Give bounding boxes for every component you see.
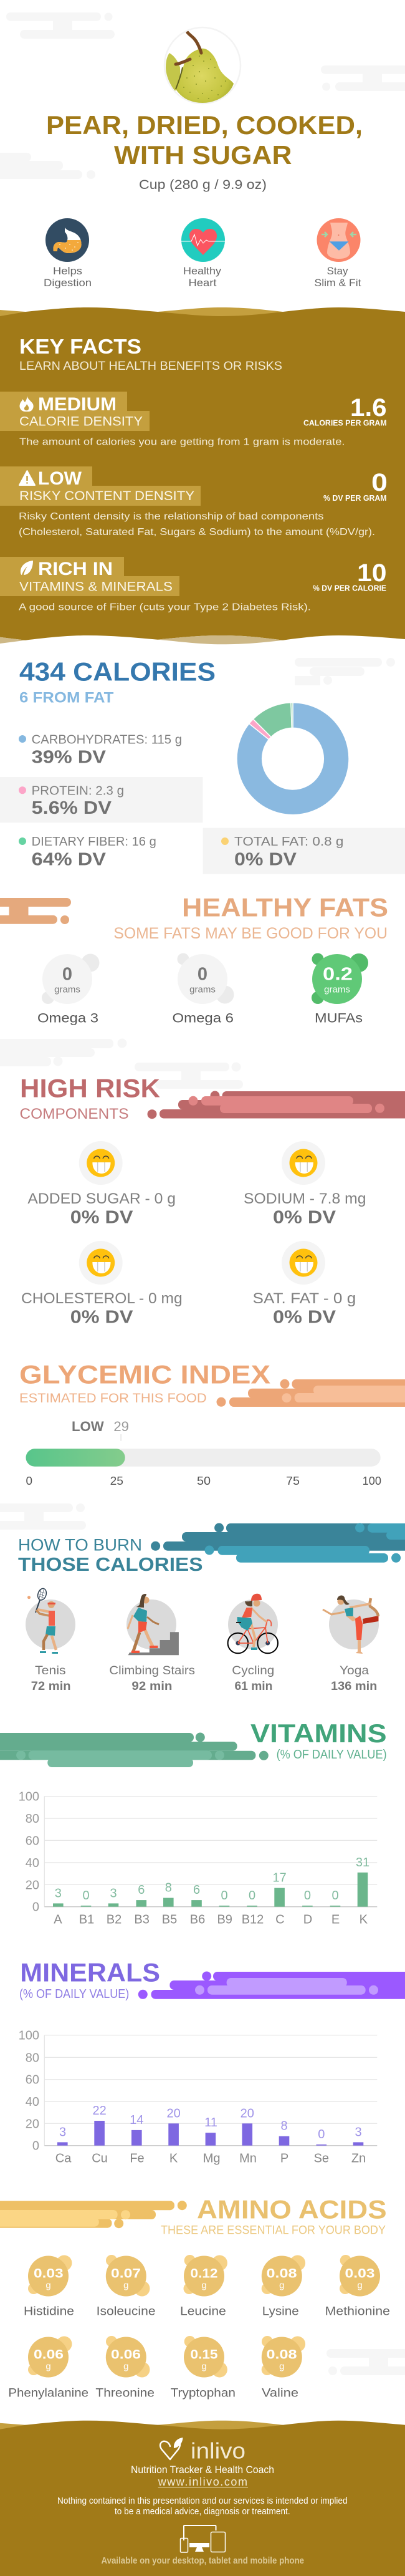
omega 3 (37, 954, 100, 1025)
label: healthy heart: Healthy (183, 265, 222, 277)
label: healthy heart (183, 265, 222, 289)
legend: dietary fiber: 64% DV (32, 849, 107, 869)
mufas: grams (324, 985, 350, 995)
bar chart: minerals: 100 (19, 2029, 39, 2043)
bar chart: minerals (19, 2029, 377, 2165)
bar chart: minerals: 20 (26, 2117, 39, 2131)
glycemic value: LOW (72, 1419, 104, 1434)
amino: phenylalanine: g (45, 2361, 51, 2371)
glycemic axis labels: 100 (363, 1475, 381, 1487)
amino: valine: 0.08 (267, 2347, 297, 2361)
activity labels: 61 min (234, 1680, 272, 1693)
activity: cycling (228, 1594, 278, 1653)
legend: protein: PROTEIN: 2.3 g (32, 783, 124, 798)
serving size: Cup (280 g / 9.9 oz) (139, 178, 267, 192)
risk: cholesterol: 0% DV (70, 1308, 133, 1328)
bar chart: vitamins (19, 1790, 377, 1926)
amino: valine: Valine (262, 2386, 298, 2400)
bar chart: vitamins: B3 (134, 1913, 150, 1926)
bar chart: minerals: Zn (351, 2151, 366, 2165)
amino: lysine: 0.08 (267, 2266, 297, 2280)
mufas: MUFAs (315, 1011, 363, 1025)
bar chart: vitamins: E (331, 1913, 340, 1926)
risk: sodium: 0% DV (273, 1208, 336, 1228)
icon: leaf (21, 561, 33, 575)
omega 3: Omega 3 (37, 1011, 98, 1025)
amino: histidine: 0.03 (34, 2266, 64, 2280)
amino: phenylalanine: 0.06 (34, 2347, 64, 2361)
glycemic axis labels: 75 (286, 1475, 300, 1487)
label: healthy heart: Heart (188, 277, 217, 289)
value: 1.6 calories per gram: CALORIES PER GRAM (303, 419, 387, 428)
bar chart: vitamins: B2 (107, 1913, 122, 1926)
heading: healthy fats (113, 892, 388, 942)
bar chart: vitamins: 8 (165, 1881, 172, 1894)
panel: healthy fats (0, 892, 388, 1025)
heading decoration (217, 1379, 405, 1407)
heading: amino acids: THESE ARE ESSENTIAL FOR YOUR BODY (161, 2224, 386, 2237)
bar chart: minerals: 22 (92, 2104, 107, 2118)
amino: valine: g (279, 2361, 284, 2371)
risk: saturated fat: SAT. FAT - 0 g (253, 1290, 356, 1307)
activity: climbing stairs (126, 1594, 179, 1655)
icon: flame (19, 395, 34, 412)
panel: header (44, 27, 363, 289)
bar chart: minerals: Cu (92, 2151, 108, 2165)
value: 10 percent dv per calorie: 10 (357, 559, 387, 587)
bar chart: minerals: 14 (130, 2113, 143, 2127)
bar chart: minerals: P (280, 2151, 288, 2165)
activity labels: 136 min (331, 1680, 377, 1693)
risk: cholesterol (21, 1241, 183, 1328)
fact name: CALORIE DENSITY (19, 414, 143, 429)
legend: carbohydrates: CARBOHYDRATES: 115 g (32, 732, 182, 746)
label: stay slim and fit (314, 265, 361, 289)
bar chart: minerals: Se (314, 2151, 329, 2165)
heading: high risk: HIGH RISK (20, 1073, 160, 1102)
bar chart: vitamins: C (275, 1913, 285, 1926)
amino: lysine: Lysine (262, 2305, 299, 2318)
icon: warning (19, 471, 35, 485)
amino: threonine (95, 2336, 155, 2400)
bar chart: minerals: 0 (32, 2139, 39, 2153)
amino: isoleucine: g (123, 2280, 128, 2290)
value: 0 percent dv per gram (323, 469, 388, 503)
heading decoration (147, 1091, 405, 1119)
amino: histidine (24, 2255, 74, 2318)
title: PEAR, DRIED, COOKED, (46, 110, 363, 140)
bar chart: minerals: 3 (59, 2125, 66, 2139)
activity labels: Tenis (35, 1664, 66, 1677)
rating: medium: MEDIUM (38, 394, 117, 415)
value: 10 percent dv per calorie (313, 559, 387, 593)
bar chart: vitamins: K (360, 1913, 368, 1926)
fact name: RISKY CONTENT DENSITY (19, 488, 194, 503)
bar chart: minerals: 20 (166, 2106, 181, 2120)
amino: methionine: g (357, 2280, 363, 2290)
heading: minerals: MINERALS (20, 1957, 160, 1987)
bar chart: minerals: 80 (26, 2051, 39, 2065)
bar chart: vitamins: 0 (249, 1889, 255, 1903)
disclaimer (57, 2496, 348, 2517)
bar chart: minerals: Fe (130, 2151, 145, 2165)
description: (Cholesterol, Saturated Fat, Sugars & Sodium) to the amount (%DV/gr). (19, 527, 375, 538)
omega 6: 0 (198, 965, 207, 985)
bar chart: vitamins: 60 (26, 1834, 39, 1848)
heading: glycemic index: GLYCEMIC INDEX (19, 1359, 270, 1389)
legend: dietary fiber: DIETARY FIBER: 16 g (32, 834, 156, 849)
title (46, 110, 363, 170)
bar chart: vitamins: 0 (221, 1889, 228, 1903)
risk: saturated fat (253, 1241, 356, 1328)
logo: inlivo: inlivo (191, 2438, 245, 2463)
glycemic axis labels: 25 (110, 1475, 123, 1487)
heading: minerals (19, 1957, 160, 2001)
glycemic value (72, 1419, 129, 1441)
icon: stay slim (317, 218, 360, 262)
amino: tryptophan: g (201, 2361, 207, 2371)
amino: isoleucine: Isoleucine (97, 2305, 156, 2318)
amino: methionine: 0.03 (345, 2266, 375, 2280)
bar chart: vitamins: 40 (26, 1856, 39, 1870)
omega 6: Omega 6 (172, 1011, 234, 1025)
tagline: Nutrition Tracker & Health Coach (131, 2464, 274, 2476)
omega 3: 0 (62, 965, 72, 985)
description: The amount of calories you are getting from 1 gram is moderate. (19, 437, 345, 448)
donut chart (237, 703, 349, 815)
risk: added sugar (27, 1141, 176, 1228)
risk: saturated fat: 0% DV (273, 1308, 336, 1328)
activity labels: Climbing Stairs (109, 1664, 195, 1677)
heading: vitamins (250, 1719, 387, 1762)
heading: glycemic index (19, 1359, 270, 1406)
legend: protein (0, 777, 203, 822)
activity labels (31, 1664, 377, 1693)
fact: calorie density (0, 392, 387, 448)
amino: tryptophan (171, 2336, 236, 2400)
description (19, 511, 375, 538)
panel: vitamins (0, 1719, 387, 1926)
risk: sodium: SODIUM - 7.8 mg (244, 1190, 366, 1207)
heading: minerals: (% OF DAILY VALUE) (19, 1987, 129, 2001)
legend: dietary fiber (19, 834, 156, 869)
risk: sodium (244, 1141, 366, 1228)
glycemic bar (26, 1449, 381, 1467)
legend: total fat: TOTAL FAT: 0.8 g (234, 834, 343, 849)
bar chart: vitamins: 3 (110, 1886, 117, 1900)
value: 1.6 calories per gram: 1.6 (350, 394, 387, 422)
mufas: 0.2 (323, 965, 353, 985)
icon: devices (181, 2525, 226, 2552)
bar chart: minerals: 0 (318, 2128, 325, 2141)
amino: lysine (262, 2255, 305, 2318)
availability note: Available on your desktop, tablet and mobile phone (101, 2556, 304, 2566)
label: stay slim and fit: Stay (326, 265, 348, 277)
heading: amino acids: AMINO ACIDS (197, 2195, 387, 2224)
bar chart: minerals: Ca (55, 2151, 72, 2165)
value: 1.6 calories per gram (303, 394, 387, 428)
heading decoration (0, 1732, 269, 1767)
bar chart: vitamins: 0 (304, 1889, 311, 1903)
glycemic axis labels: 0 (26, 1475, 32, 1487)
heading: 434 calories: 434 CALORIES (19, 657, 216, 687)
disclaimer: to be a medical advice, diagnosis or treatment. (115, 2507, 290, 2517)
risk: added sugar: ADDED SUGAR - 0 g (27, 1190, 176, 1207)
bar chart: minerals: 20 (241, 2106, 254, 2120)
bar chart: minerals: 60 (26, 2073, 39, 2087)
panel: key facts (0, 307, 405, 644)
bar chart: vitamins: 0 (32, 1901, 39, 1914)
heading: key facts: KEY FACTS (19, 335, 141, 358)
heading decoration (0, 898, 71, 924)
activity labels: 72 min (31, 1680, 71, 1693)
bar chart: minerals: Mg (203, 2151, 220, 2165)
mufas (312, 953, 368, 1025)
amino: tryptophan: Tryptophan (171, 2386, 236, 2400)
icon: digestion (45, 218, 89, 262)
bar chart: minerals: 11 (204, 2116, 217, 2130)
amino: leucine: g (201, 2280, 207, 2290)
legend: carbohydrates (19, 732, 182, 767)
heading: key facts: LEARN ABOUT HEALTH BENEFITS OR RISKS (19, 359, 282, 373)
legend: carbohydrates: 39% DV (32, 747, 107, 767)
bar chart: vitamins: 20 (26, 1878, 39, 1892)
omega 6: grams (189, 985, 216, 995)
heading: vitamins: VITAMINS (250, 1719, 387, 1748)
bar chart: minerals: 3 (355, 2125, 362, 2139)
panel: footer (0, 2421, 405, 2576)
amino: histidine: g (45, 2280, 51, 2290)
bar chart: minerals: 40 (26, 2095, 39, 2109)
panel: glycemic index (19, 1359, 405, 1487)
panel: calories (0, 657, 405, 874)
heading: 434 calories (19, 657, 216, 707)
bar chart: vitamins: D (303, 1913, 312, 1926)
bar chart: vitamins: 80 (26, 1812, 39, 1826)
rating: rich in: RICH IN (38, 559, 113, 579)
legend: total fat (203, 828, 405, 874)
bar chart: vitamins: 0 (331, 1889, 339, 1903)
bar chart: vitamins: 31 (356, 1856, 369, 1869)
amino: lysine: g (279, 2280, 284, 2290)
amino: tryptophan: 0.15 (191, 2347, 218, 2361)
amino: threonine: Threonine (95, 2386, 155, 2400)
bar chart: minerals: 8 (280, 2120, 288, 2133)
heading: 434 calories: 6 FROM FAT (19, 690, 114, 707)
amino: histidine: Histidine (24, 2305, 74, 2318)
bar chart: minerals: K (169, 2151, 178, 2165)
activity labels: Yoga (340, 1664, 369, 1677)
activity: tennis (26, 1588, 75, 1654)
bar chart: vitamins: B1 (79, 1913, 94, 1926)
heading: high risk (20, 1073, 160, 1122)
heading: high risk: COMPONENTS (20, 1106, 128, 1122)
bar chart: vitamins: 100 (19, 1790, 39, 1804)
heading decoration (0, 2201, 187, 2228)
amino: isoleucine (97, 2255, 156, 2318)
bar chart: vitamins: B5 (162, 1913, 177, 1926)
website: www.inlivo.com (158, 2476, 247, 2488)
bar chart: vitamins: 3 (55, 1886, 62, 1900)
label: helps digestion (44, 265, 92, 289)
heading: healthy fats: SOME FATS MAY BE GOOD FOR YOU (113, 925, 388, 942)
glycemic axis labels (26, 1475, 381, 1487)
bar chart: vitamins: B6 (190, 1913, 205, 1926)
fact name: VITAMINS & MINERALS (19, 579, 173, 594)
logo: inlivo (160, 2438, 245, 2463)
rating: low: LOW (38, 468, 82, 489)
icon: healthy heart (181, 218, 225, 262)
amino: leucine: Leucine (180, 2305, 226, 2318)
description: Risky Content density is the relationship of bad components (19, 511, 324, 522)
bar chart: vitamins: B12 (242, 1913, 264, 1926)
value: 0 percent dv per gram: 0 (371, 469, 388, 496)
heading decoration (138, 1972, 405, 1999)
risk: cholesterol: CHOLESTEROL - 0 mg (21, 1290, 183, 1307)
bar chart: vitamins: A (54, 1913, 62, 1926)
heading: how to burn those calories: HOW TO BURN (18, 1536, 142, 1555)
glycemic axis labels: 50 (197, 1475, 211, 1487)
heading decoration (151, 1523, 405, 1563)
risk: added sugar: 0% DV (70, 1208, 133, 1228)
panel: minerals (19, 1957, 405, 2165)
pear photo in circle (164, 27, 241, 104)
bar chart: vitamins: B9 (217, 1913, 232, 1926)
amino: methionine (325, 2255, 390, 2318)
omega 3: grams (54, 985, 80, 995)
heading: amino acids (161, 2195, 387, 2237)
bar chart: minerals: Mn (239, 2151, 257, 2165)
disclaimer: Nothing contained in this presentation and our services is intended or implied (57, 2496, 348, 2506)
heading: vitamins: (% OF DAILY VALUE) (277, 1748, 387, 1762)
amino: isoleucine: 0.07 (111, 2266, 141, 2280)
title: WITH SUGAR (114, 140, 292, 170)
label: helps digestion: Digestion (44, 277, 92, 289)
label: stay slim and fit: Slim & Fit (314, 277, 361, 289)
amino: valine (262, 2336, 305, 2400)
panel: high risk components (20, 1073, 405, 1328)
amino: threonine: g (123, 2361, 128, 2371)
activity: yoga (323, 1596, 379, 1654)
bar chart: vitamins: 0 (82, 1889, 90, 1903)
amino: methionine: Methionine (325, 2305, 390, 2318)
heading: how to burn those calories (18, 1536, 203, 1575)
description: A good source of Fiber (cuts your Type 2 Diabetes Risk). (19, 602, 311, 613)
amino: leucine: 0.12 (191, 2266, 218, 2280)
fact: risky content density (0, 466, 388, 538)
bar chart: vitamins: 6 (138, 1883, 145, 1897)
label: helps digestion: Helps (53, 265, 82, 277)
amino: leucine (180, 2255, 227, 2318)
heading: glycemic index: ESTIMATED FOR THIS FOOD (19, 1391, 207, 1406)
amino: threonine: 0.06 (111, 2347, 141, 2361)
amino: phenylalanine (8, 2336, 88, 2400)
heading: healthy fats: HEALTHY FATS (182, 892, 388, 922)
heading: how to burn those calories: THOSE CALORIES (18, 1553, 203, 1575)
legend: protein: 5.6% DV (32, 798, 112, 818)
panel: how to burn those calories (18, 1523, 405, 1693)
bar chart: vitamins: 6 (193, 1883, 200, 1897)
activity labels: 92 min (131, 1680, 172, 1693)
omega 6 (172, 953, 234, 1025)
fact: vitamins and minerals (0, 557, 387, 613)
legend: total fat: 0% DV (234, 849, 297, 869)
amino: phenylalanine: Phenylalanine (8, 2386, 88, 2400)
glycemic value: 29 (113, 1419, 129, 1434)
heading: key facts (19, 335, 282, 373)
bar chart: vitamins: 17 (272, 1871, 287, 1885)
value: 10 percent dv per calorie: % DV PER CALORIE (313, 584, 386, 593)
panel: amino acids (0, 2195, 390, 2400)
activity labels: Cycling (232, 1664, 274, 1677)
value: 0 percent dv per gram: % DV PER GRAM (323, 494, 387, 503)
